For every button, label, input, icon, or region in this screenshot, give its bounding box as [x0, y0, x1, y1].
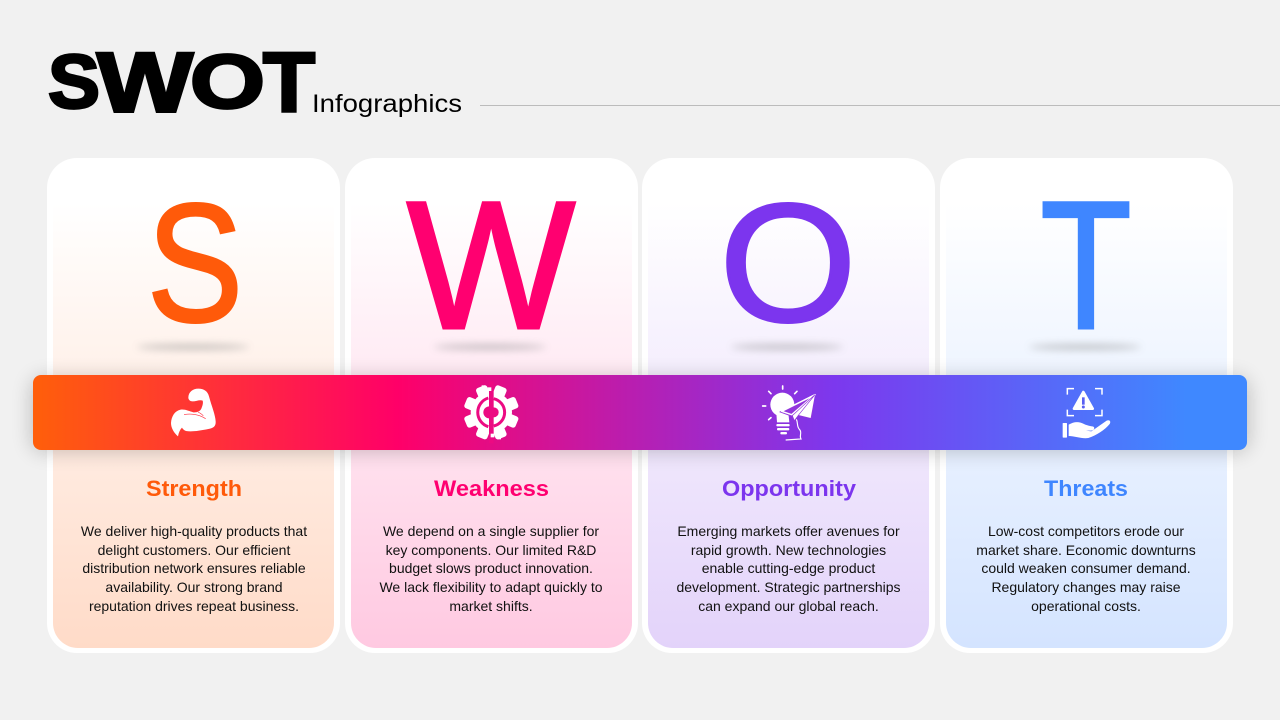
text: strength: delight customers. Our efficient	[98, 542, 290, 558]
text: strength: availability. Our strong brand	[105, 579, 283, 595]
text: opportunity: Emerging markets offer avenues for	[677, 523, 900, 539]
letter O: O	[719, 169, 857, 357]
text: strength: reputation drives repeat business.	[89, 598, 299, 614]
letter S: S	[147, 169, 243, 358]
text: weakness: key components. Our limited R&D	[386, 542, 596, 558]
text: opportunity: development. Strategic partnerships	[676, 579, 901, 595]
panel: opportunity	[642, 158, 935, 653]
text: strength	[81, 523, 307, 614]
text: threats: operational costs.	[1031, 598, 1141, 614]
title: S	[48, 40, 100, 124]
letter W: W	[407, 164, 575, 367]
title	[48, 36, 462, 130]
gradient band	[33, 375, 1247, 450]
text: threats: Low-cost competitors erode our	[988, 523, 1184, 539]
title: T	[263, 36, 315, 130]
text: threats: market share. Economic downturns	[976, 542, 1196, 558]
letter T: T	[1040, 164, 1132, 367]
text: weakness: market shifts.	[449, 598, 533, 614]
heading: weakness: Weakness	[434, 476, 549, 501]
text: threats: could weaken consumer demand.	[981, 560, 1191, 576]
icon: hand holding warning	[1063, 389, 1110, 438]
title: W	[97, 36, 194, 130]
heading: opportunity: Opportunity	[722, 476, 857, 501]
text: weakness: We depend on a single supplier for	[383, 523, 599, 539]
text: opportunity	[676, 523, 901, 614]
title: O	[190, 40, 265, 124]
icon: flexed arm	[171, 389, 216, 436]
text: opportunity: rapid growth. New technologies	[691, 542, 886, 558]
text: weakness: budget slows product innovation.	[389, 560, 593, 576]
text: threats: Regulatory changes may raise	[991, 579, 1181, 595]
text: weakness	[379, 523, 603, 614]
title: Infographics	[312, 90, 462, 118]
heading: threats: Threats	[1044, 476, 1128, 501]
text: opportunity: enable cutting-edge product	[702, 560, 875, 576]
icon: split gear	[463, 381, 519, 443]
icon: lightbulb and paper plane	[763, 386, 815, 440]
heading: strength: Strength	[146, 476, 242, 501]
panel: threats	[940, 158, 1233, 653]
panel: strength	[47, 158, 340, 653]
text: opportunity: can expand our global reach.	[698, 598, 879, 614]
text: weakness: We lack flexibility to adapt quickly to	[379, 579, 603, 595]
text: threats	[976, 523, 1196, 614]
panel: weakness	[345, 158, 638, 653]
text: strength: distribution network ensures reliable	[82, 560, 306, 576]
text: strength: We deliver high-quality products that	[81, 523, 307, 539]
